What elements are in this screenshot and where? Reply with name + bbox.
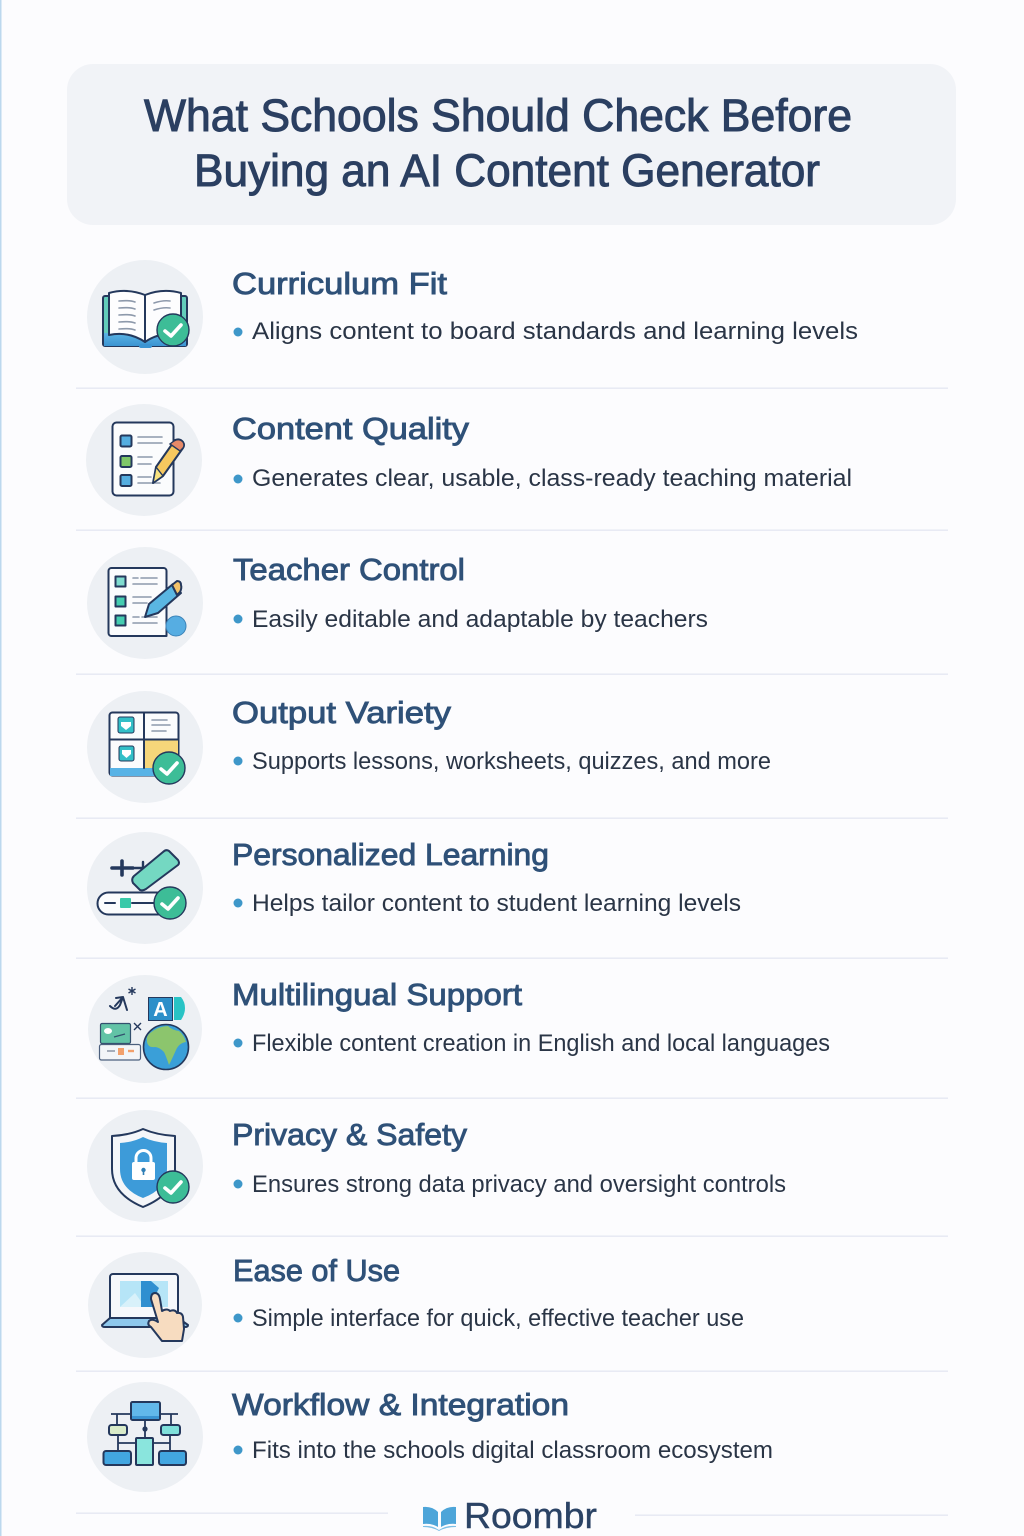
row: Teacher Control: [87, 547, 708, 659]
description: Generates clear, usable, class-ready teaching material: [252, 465, 852, 492]
description: Supports lessons, worksheets, quizzes, and more: [252, 748, 771, 775]
icon: open book with check: [87, 260, 203, 374]
heading: Output Variety: [232, 695, 452, 730]
row: Privacy & Safety: [87, 1110, 786, 1222]
heading: Teacher Control: [233, 552, 465, 587]
description: Ensures strong data privacy and oversight controls: [252, 1171, 786, 1198]
title: Buying an AI Content Generator: [194, 145, 820, 196]
title: [144, 90, 852, 196]
row: Curriculum Fit: [87, 260, 858, 374]
icon: shield with lock: [87, 1110, 203, 1222]
icon: slider with eraser and check: [87, 832, 203, 944]
row: Ease of Use: [88, 1252, 744, 1358]
row: Workflow & Integration: [87, 1382, 773, 1492]
heading: Multilingual Support: [232, 977, 522, 1012]
description: Aligns content to board standards and learning levels: [252, 318, 858, 345]
description: Flexible content creation in English and local languages: [252, 1030, 830, 1057]
heading: Content Quality: [232, 411, 470, 446]
heading: Privacy & Safety: [232, 1117, 468, 1152]
description: Helps tailor content to student learning levels: [252, 890, 741, 917]
row: Content Quality: [86, 404, 852, 516]
heading: Ease of Use: [233, 1253, 400, 1288]
icon: workflow diagram: [87, 1382, 203, 1492]
icon: editable checklist with pencil: [87, 547, 203, 659]
icon: checklist with pencil: [86, 404, 202, 516]
title panel: [67, 64, 956, 225]
heading: Workflow & Integration: [232, 1387, 569, 1422]
row: Output Variety: [87, 691, 771, 803]
icon: blue book: [423, 1507, 456, 1531]
description: Easily editable and adaptable by teachers: [252, 606, 708, 633]
description: Fits into the schools digital classroom ecosystem: [252, 1437, 773, 1464]
icon: laptop with pointing hand: [88, 1252, 202, 1358]
wordmark: Roombr: [464, 1495, 597, 1536]
row: Personalized Learning: [87, 832, 741, 944]
icon: languages and globe: A: [153, 999, 168, 1021]
icon: output grid with check: [87, 691, 203, 803]
row: Multilingual Support: [88, 975, 830, 1083]
footer logo: Roombr: [423, 1495, 597, 1536]
description: Simple interface for quick, effective teacher use: [252, 1305, 744, 1332]
title: What Schools Should Check Before: [144, 90, 852, 141]
heading: Personalized Learning: [232, 837, 549, 872]
icon: languages and globe: [88, 975, 202, 1083]
heading: Curriculum Fit: [232, 266, 447, 301]
